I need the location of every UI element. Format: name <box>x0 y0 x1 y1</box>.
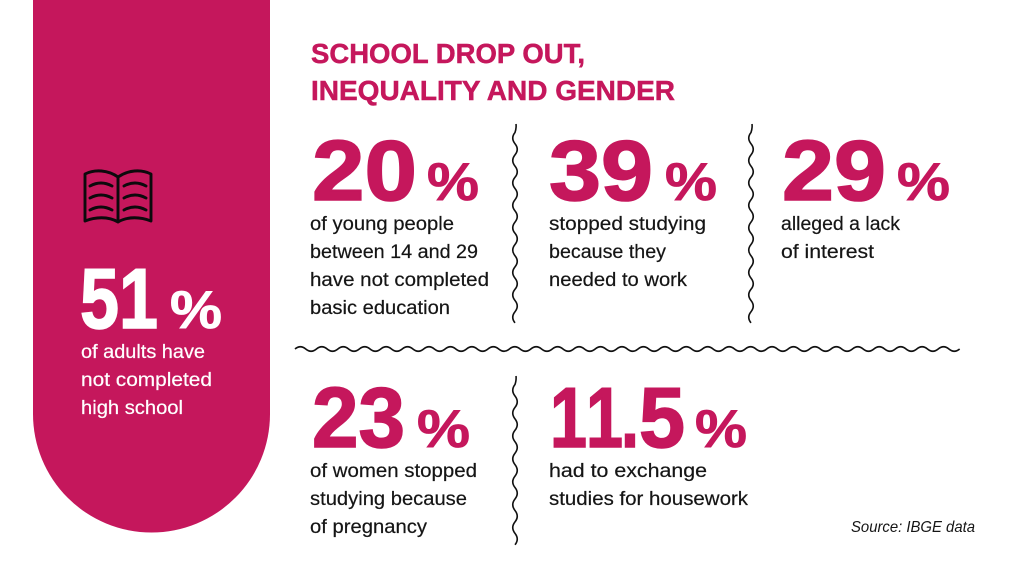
stat: 29% lack of interest <box>781 124 950 263</box>
text: adults description: of adults have <box>81 342 205 363</box>
title: INEQUALITY AND GENDER <box>311 75 675 106</box>
stat: 51% <box>80 252 222 347</box>
stat: 11.5% housework: 5 <box>639 371 685 466</box>
stat: 23% pregnancy: of women stopped <box>310 461 477 482</box>
stat: 11.5% housework: % <box>695 400 747 459</box>
text: adults description: not completed <box>81 370 212 391</box>
text: adults description: high school <box>81 398 183 419</box>
stat: 20% of young people: % <box>427 153 479 212</box>
stat: 11.5% housework: 1 <box>586 371 623 466</box>
stat: 29% lack of interest: of interest <box>781 242 875 263</box>
stat: 23% pregnancy: of pregnancy <box>310 517 428 538</box>
stat: 39% needed to work: because they <box>549 242 667 263</box>
stat: 39% needed to work <box>549 124 717 291</box>
stat: 23% pregnancy: studying because <box>310 489 467 510</box>
stat: 20% of young people: between 14 and 29 <box>310 242 478 263</box>
source note: Source: IBGE data <box>851 519 975 536</box>
stat: 51%: % <box>170 281 222 340</box>
panel: left adult statistic <box>33 0 270 532</box>
stat: 23% pregnancy <box>310 371 477 538</box>
stat: 39% needed to work: % <box>665 153 717 212</box>
stat: 20% of young people: basic education <box>310 298 450 319</box>
stat: 11.5% housework: . <box>621 371 639 466</box>
stat: 11.5% housework <box>549 371 749 510</box>
stat: 29% lack of interest: % <box>897 153 950 212</box>
stat: 39% needed to work: 39 <box>549 124 653 219</box>
text: adults description <box>81 342 212 419</box>
stat: 20% of young people: of young people <box>310 214 454 235</box>
stat: 20% of young people: have not completed <box>310 270 489 291</box>
stat: 23% pregnancy: % <box>417 400 470 459</box>
stat: 11.5% housework: 1 <box>550 371 587 466</box>
stat: 20% of young people: 20 <box>312 124 417 219</box>
stat: 29% lack of interest: 29 <box>782 124 886 219</box>
icon: open book <box>85 171 151 222</box>
stat: 39% needed to work: needed to work <box>549 270 688 291</box>
stat: 23% pregnancy: 23 <box>312 371 405 466</box>
stat: 11.5% housework: studies for housework <box>549 489 749 510</box>
stat: 39% needed to work: stopped studying <box>549 214 706 235</box>
title: SCHOOL DROP OUT, <box>311 38 585 69</box>
title <box>311 38 675 106</box>
stat: 29% lack of interest: alleged a lack <box>781 214 900 235</box>
stat: 11.5% housework: had to exchange <box>549 461 707 482</box>
stat: 51%: 51 <box>80 252 158 347</box>
stat: 20% of young people <box>310 124 489 319</box>
